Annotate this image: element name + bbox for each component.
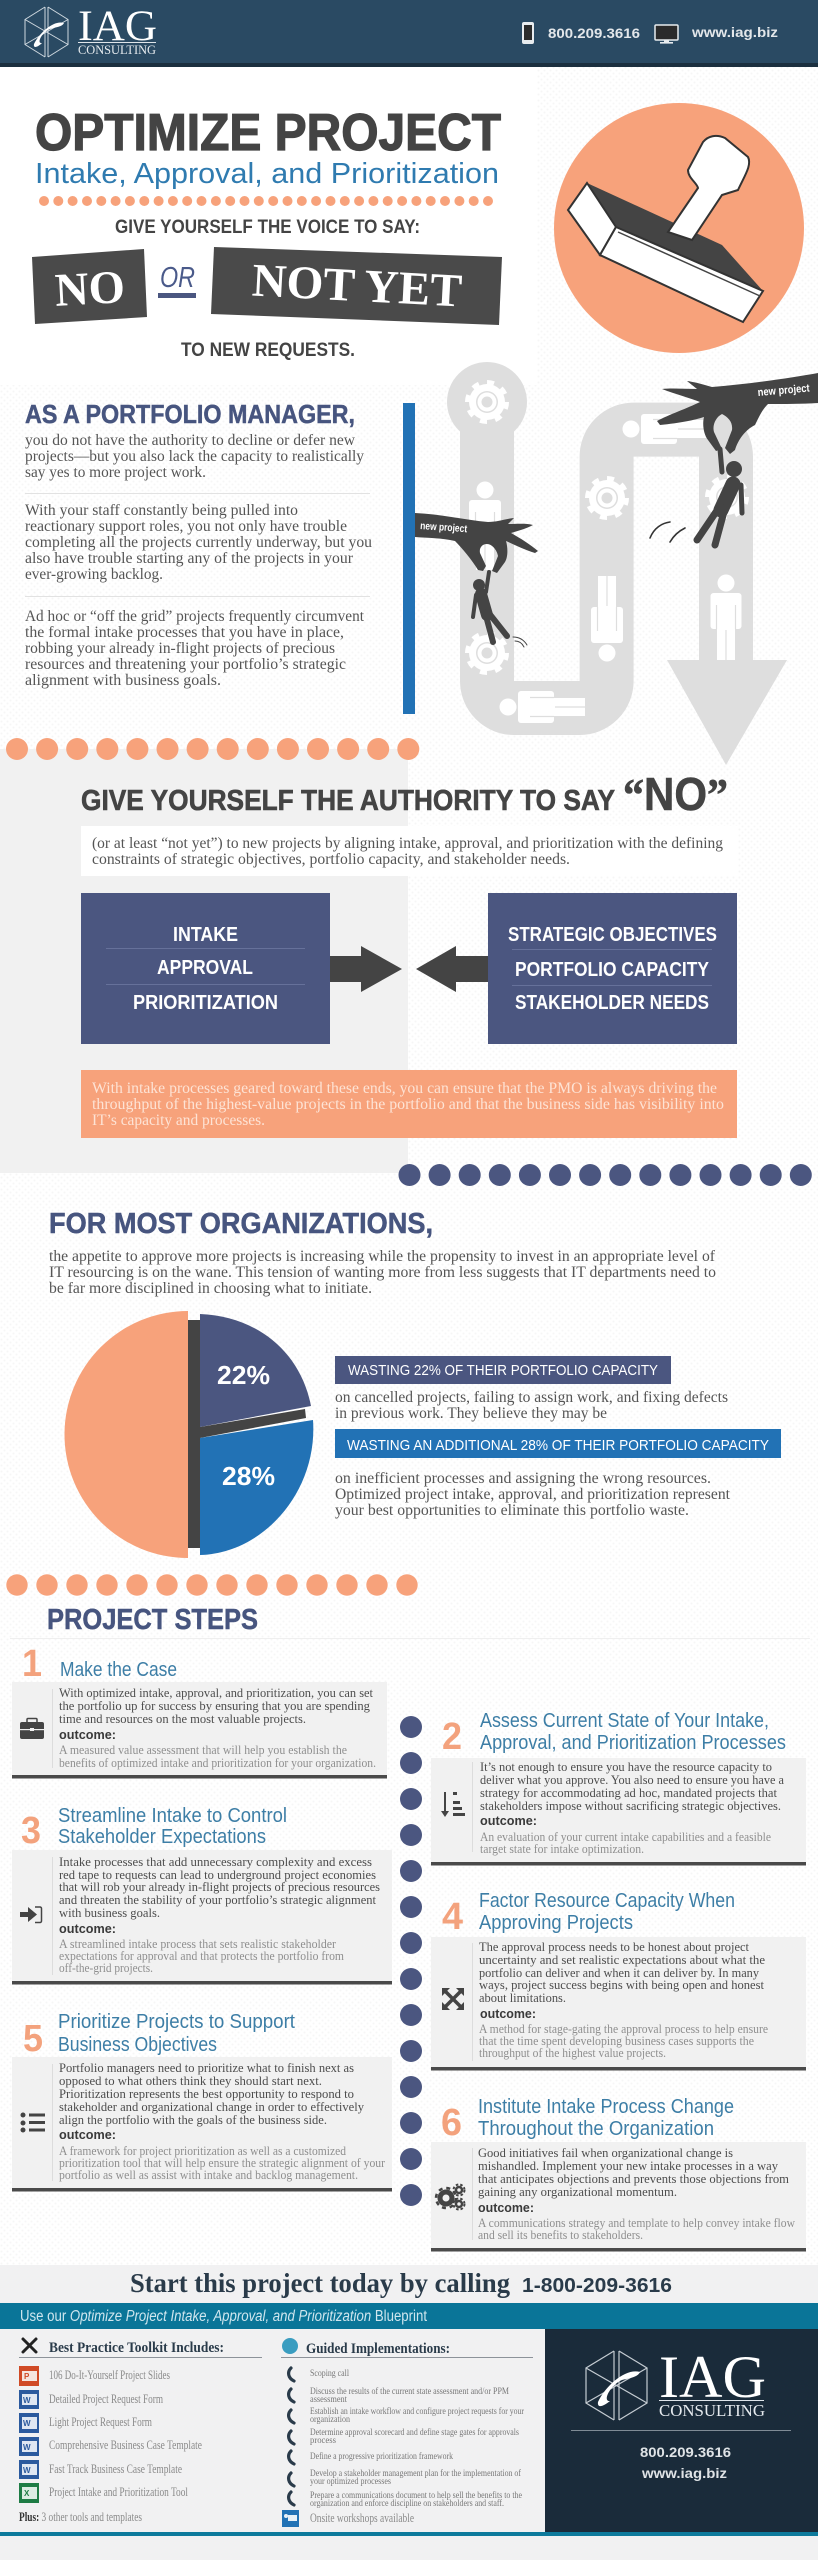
paragraph three — [25, 608, 365, 689]
step 5: Portfolio managers need to prioritize what to finish next as — [59, 2060, 354, 2075]
gear top — [468, 382, 506, 422]
intro text box: (or at least “not yet”) to new projects by aligning intake, approval, and prioritization with the defining — [92, 835, 723, 852]
step 1: the portfolio up for success by ensuring that you are spending — [59, 1698, 370, 1713]
step 2 — [431, 1710, 806, 1866]
phone icons — [289, 2368, 294, 2505]
icon: expand arrows — [442, 1988, 464, 2010]
box: intake approval prioritization: APPROVAL — [157, 957, 253, 979]
paragraph three: Ad hoc or “off the grid” projects frequently circumvent — [25, 608, 365, 625]
guided items: Prepare a communications document to help sell the benefits to the — [310, 2490, 522, 2501]
step 3: A streamlined intake process that sets realistic stakeholder — [59, 1937, 337, 1951]
step 2: outcome: — [480, 1813, 537, 1828]
teal blueprint band — [0, 2303, 818, 2329]
call to action: Start this project today by calling — [130, 2268, 510, 2298]
subtitle: Intake, Approval, and Prioritization — [35, 158, 499, 190]
icon: monitor — [655, 25, 678, 44]
label: wasting 28 — [335, 1429, 781, 1458]
guided items: your optimized processes — [310, 2477, 391, 2487]
gear lower left — [468, 634, 506, 672]
step 1: time and resources on the most valuable projects. — [59, 1711, 306, 1726]
box: intake approval prioritization — [81, 893, 330, 1044]
stamp: no — [32, 249, 147, 324]
blue bar — [403, 403, 415, 714]
icon: blue circle — [282, 2338, 298, 2354]
step 2: strategy for accommodating ad hoc, mandated projects that — [480, 1785, 777, 1800]
label: wasting 22 — [335, 1356, 671, 1384]
step 2: Assess Current State of Your Intake, — [480, 1710, 769, 1732]
icon: list — [20, 2112, 45, 2132]
toolkit item: light form: W — [23, 2419, 31, 2428]
header phone number: 800.209.3616 — [548, 25, 640, 41]
heading: authority to say no: “NO” — [623, 768, 728, 820]
paragraph one — [25, 432, 364, 481]
toolkit item: slides: 106 Do-It-Yourself Project Slides — [49, 2368, 170, 2382]
label: new project left: new project — [420, 520, 468, 535]
orange callout: With intake processes geared toward these ends, you can ensure that the PMO is always driving the — [92, 1080, 717, 1097]
step 1: benefits of optimized intake and prioritization for your organization. — [59, 1756, 376, 1770]
navy vertical dots — [400, 1716, 422, 2206]
guided heading: Guided Implementations: — [306, 2341, 450, 2357]
box: intake approval prioritization: INTAKE — [173, 924, 238, 946]
paragraph: appetite — [49, 1248, 716, 1297]
toolkit item: light form — [19, 2413, 152, 2433]
label: new project right: new project — [757, 382, 810, 399]
gear middle — [588, 478, 626, 518]
icon: sort — [441, 1792, 465, 1817]
toolkit item: fast track: Fast Track Business Case Template — [49, 2462, 182, 2476]
step 6: A communications strategy and template to help convey intake flow — [478, 2216, 795, 2230]
box: objectives capacity needs: STRATEGIC OBJECTIVES — [508, 924, 717, 946]
icon: rubber stamp in orange circle — [554, 103, 804, 353]
guided items: Discuss the results of the current state assessment and/or PPM — [310, 2386, 509, 2397]
tagline: GIVE YOURSELF THE VOICE TO SAY: — [115, 217, 420, 238]
person horizontal bottom — [500, 691, 585, 723]
road path — [447, 362, 787, 765]
text: cancelled projects — [335, 1389, 728, 1422]
step 3: Streamline Intake to Control — [58, 1805, 287, 1827]
paragraph three: the formal intake processes that you have in place, — [25, 624, 344, 641]
paragraph two: reactionary support roles, you not only have trouble — [25, 518, 347, 535]
stamp: no: NO — [54, 261, 126, 317]
heading: for most organizations: FOR MOST ORGANIZATIONS, — [49, 1208, 433, 1240]
box: objectives capacity needs — [488, 893, 737, 1044]
step 4: uncertainty and set realistic expectations about what the — [479, 1952, 765, 1967]
gray section background — [0, 749, 408, 1173]
heading: authority to say no — [81, 768, 728, 820]
step 6: outcome: — [478, 2200, 534, 2215]
paragraph two: ever-growing backlog. — [25, 566, 163, 583]
toolkit item: tool — [19, 2483, 188, 2503]
step 5: 5 — [23, 2018, 43, 2060]
paragraph: appetite: the appetite to approve more projects is increasing while the propensity to invest in an appropriate level of — [49, 1248, 716, 1265]
icon: sign in — [20, 1907, 42, 1922]
stamp: not yet — [211, 247, 502, 325]
step 4: portfolio can deliver and when it can deliver by. In many — [479, 1965, 759, 1980]
guided items: Determine approval scorecard and define stage gates for approvals — [310, 2427, 519, 2438]
paragraph two — [25, 502, 372, 583]
orange callout — [81, 1070, 737, 1138]
orange callout: IT’s capacity and processes. — [92, 1112, 265, 1129]
footer website: www.iag.biz — [641, 2465, 727, 2481]
intro text box — [81, 826, 738, 876]
step 3: Stakeholder Expectations — [58, 1826, 266, 1848]
icon: phone — [522, 22, 534, 44]
step 4: about limitations. — [479, 1990, 566, 2005]
stamp: not yet: NOT YET — [251, 255, 463, 317]
header logo — [25, 3, 157, 57]
step 2: An evaluation of your current intake capabilities and a feasible — [480, 1830, 771, 1844]
step 5: align the portfolio with the goals of the business side. — [59, 2112, 327, 2127]
paragraph three: resources and threatening your portfolio’s strategic — [25, 656, 346, 673]
paragraph two: With your staff constantly being pulled into — [25, 502, 298, 519]
label: wasting 22: WASTING 22% OF THEIR PORTFOLIO CAPACITY — [348, 1362, 658, 1379]
step 6: mishandled. Implement your new intake processes in a way — [478, 2158, 778, 2173]
step 5: stakeholder and organizational change in order to effectively — [59, 2099, 364, 2114]
panel: best practice toolkit — [19, 2339, 262, 2524]
to new requests: TO NEW REQUESTS. — [181, 340, 355, 361]
winding road illustration — [447, 362, 787, 765]
plus note: Plus: 3 other tools and templates — [19, 2510, 142, 2524]
step 6: and sell its benefits to stakeholders. — [478, 2228, 643, 2242]
pie chart: 22% — [217, 1360, 270, 1390]
gear right — [708, 478, 746, 516]
arrow: left — [416, 946, 488, 992]
step 1: outcome: — [59, 1727, 116, 1742]
toolkit item: detailed form: Detailed Project Request Form — [49, 2392, 163, 2406]
heading: AS A PORTFOLIO MANAGER, — [25, 399, 355, 429]
step 3: 3 — [21, 1810, 41, 1852]
toolkit item: fast track: W — [23, 2466, 31, 2475]
guided items: Define a progressive prioritization framework — [310, 2451, 453, 2462]
step 2: stakeholders impose without sacrificing strategic objectives. — [480, 1798, 781, 1813]
step 5: outcome: — [59, 2127, 116, 2142]
box: intake approval prioritization: PRIORITIZATION — [133, 992, 278, 1014]
step 3 — [12, 1805, 392, 1984]
step 5: A framework for project prioritization as well as a customized — [59, 2144, 347, 2158]
person horizontal top — [622, 414, 708, 444]
footer brand block — [545, 2329, 818, 2532]
header website: www.iag.biz — [691, 24, 778, 40]
step 6: gaining any organizational momentum. — [478, 2184, 677, 2199]
guided items: Establish an intake workflow and configure project requests for your — [310, 2406, 525, 2417]
text: cancelled projects: on cancelled projects, failing to assign work, and fixing defects — [335, 1389, 728, 1406]
orange dot divider — [6, 738, 419, 760]
step 1 — [12, 1643, 387, 1778]
person vertical left — [469, 482, 501, 570]
pie chart: 28% — [222, 1461, 275, 1491]
step 4: Approving Projects — [479, 1912, 633, 1934]
step 4: Factor Resource Capacity When — [479, 1890, 735, 1912]
step 1: With optimized intake, approval, and prioritization, you can set — [59, 1685, 373, 1700]
footer phone: 800.209.3616 — [640, 2444, 731, 2460]
toolkit item: tool: Project Intake and Prioritization Tool — [49, 2485, 188, 2499]
footer logo: IAG — [659, 2344, 766, 2410]
step 4: 4 — [442, 1896, 463, 1938]
paragraph three: alignment with business goals. — [25, 672, 221, 689]
step 2: deliver what you approve. You also need to ensure you have a — [480, 1772, 784, 1787]
guided items: assessment — [310, 2395, 347, 2405]
icon: workshop — [282, 2510, 299, 2527]
box: objectives capacity needs: PORTFOLIO CAPACITY — [515, 959, 710, 981]
step 4 — [431, 1890, 806, 2070]
orange dot row — [39, 196, 493, 206]
guided items: organization — [310, 2415, 350, 2425]
panel: guided implementations — [281, 2338, 533, 2527]
toolkit heading: Best Practice Toolkit Includes: — [49, 2340, 224, 2356]
panel: portfolio manager text — [25, 399, 372, 689]
toolkit item: business case: W — [23, 2443, 31, 2452]
step 5: opposed to what others think they should start next. — [59, 2073, 322, 2088]
paragraph: appetite: IT resourcing is on the wane. This tension of wanting more from less suggests that IT departments need to — [49, 1264, 716, 1281]
footer logo: CONSULTING — [659, 2401, 765, 2420]
step 6: Throughout the Organization — [478, 2118, 714, 2140]
step 3: Intake processes that add unnecessary complexity and excess — [59, 1854, 372, 1869]
person upside down — [591, 576, 623, 662]
title: OPTIMIZE PROJECT — [35, 104, 501, 162]
header logo: CONSULTING — [78, 42, 156, 57]
step 2: It’s not enough to ensure you have the resource capacity to — [480, 1759, 772, 1774]
step 5: portfolio as well as assist with intake and backlog management. — [59, 2168, 358, 2182]
paragraph one: you do not have the authority to decline or defer new — [25, 432, 356, 449]
step 5 — [12, 2011, 392, 2192]
heading: authority to say no: GIVE YOURSELF THE AUTHORITY TO SAY — [81, 785, 615, 817]
icon: tools — [23, 2339, 36, 2352]
step 5: prioritization tool that will help ensure the strategic alignment of your — [59, 2156, 386, 2170]
step 3: that will rob your already in-flight projects of precious resources — [59, 1879, 380, 1894]
header logo: IAG — [78, 3, 157, 50]
step 2: Approval, and Prioritization Processes — [480, 1732, 786, 1754]
toolkit item: fast track — [19, 2460, 182, 2479]
intro text box: constraints of strategic objectives, portfolio capacity, and stakeholder needs. — [92, 851, 570, 868]
text: inefficient processes — [335, 1470, 731, 1519]
hanging figure right — [650, 449, 742, 545]
paragraph one: say yes to more project work. — [25, 464, 206, 481]
step 5: Prioritize Projects to Support — [58, 2011, 295, 2033]
teal blueprint band: Use our Optimize Project Intake, Approval, and Prioritization Blueprint — [20, 2308, 428, 2325]
step 2: 2 — [442, 1716, 462, 1758]
header bar — [0, 0, 818, 67]
toolkit item: business case: Comprehensive Business Case Template — [49, 2438, 202, 2452]
left hand holding figure — [415, 513, 538, 647]
text: inefficient processes: your best opportunities to eliminate this portfolio waste. — [335, 1502, 689, 1519]
text: inefficient processes: Optimized project intake, approval, and prioritization represent — [335, 1486, 731, 1503]
right hand holding figure — [650, 373, 818, 545]
step 2: target state for intake optimization. — [480, 1842, 644, 1856]
step 6: that anticipates objections and prevents those objections from — [478, 2171, 789, 2186]
box: objectives capacity needs: STAKEHOLDER NEEDS — [515, 992, 709, 1014]
toolkit item: slides — [19, 2366, 170, 2386]
call to action: 1-800-209-3616 — [522, 2275, 672, 2297]
arrow: right — [330, 946, 402, 992]
step 6 — [431, 2096, 806, 2252]
step 5: Business Objectives — [58, 2034, 217, 2056]
toolkit item: business case — [19, 2437, 202, 2456]
step 4: A method for stage-gating the approval process to help ensure — [479, 2022, 768, 2036]
toolkit item: tool: X — [24, 2489, 30, 2498]
hanging figure left — [473, 572, 527, 647]
step 3: and threaten the stability of your portfolio’s strategic alignment — [59, 1892, 376, 1907]
icon: gears — [436, 2184, 464, 2210]
label: wasting 28: WASTING AN ADDITIONAL 28% OF THEIR PORTFOLIO CAPACITY — [347, 1437, 769, 1454]
step 1: Make the Case — [60, 1659, 177, 1681]
paragraph one: projects—but you also lack the capacity to realistically — [25, 448, 364, 465]
or: OR — [160, 262, 195, 294]
toolkit item: detailed form — [19, 2390, 163, 2409]
step 3: with business goals. — [59, 1905, 160, 1920]
step 1: A measured value assessment that will help you establish the — [59, 1743, 347, 1757]
toolkit item: slides: P — [24, 2372, 30, 2381]
guided items: Scoping call — [310, 2369, 349, 2379]
person vertical right — [710, 574, 742, 660]
step 4: ways, project success begins with being open and honest — [479, 1977, 764, 1992]
heading: project steps: PROJECT STEPS — [47, 1604, 258, 1636]
paragraph two: also have trouble starting any of the projects in your — [25, 550, 354, 567]
onsite text: Onsite workshops available — [310, 2511, 414, 2525]
text: inefficient processes: on inefficient processes and assigning the wrong resources. — [335, 1470, 711, 1487]
step 6: Good initiatives fail when organizational change is — [478, 2145, 733, 2160]
step 6: Institute Intake Process Change — [478, 2096, 734, 2118]
paragraph three: robbing your already in-flight projects of precious — [25, 640, 335, 657]
step 4: throughput of the highest value projects. — [479, 2046, 666, 2060]
step 3: expectations for approval and that protects the portfolio from — [59, 1949, 344, 1963]
navy dot divider — [398, 1164, 812, 1186]
step 3: off-the-grid projects. — [59, 1961, 153, 1975]
toolkit item: light form: Light Project Request Form — [49, 2415, 152, 2429]
text: cancelled projects: in previous work. They believe they may be — [335, 1405, 607, 1422]
step 4: The approval process needs to be honest about project — [479, 1939, 749, 1954]
step 4: that the time spent developing business cases supports the — [479, 2034, 754, 2048]
guided items — [310, 2369, 525, 2509]
guided items: organization and enforce discipline on stakeholders and staff. — [310, 2498, 504, 2509]
icon: briefcase — [20, 1718, 44, 1739]
guided items: Develop a stakeholder management plan for the implementation of — [310, 2468, 522, 2479]
toolkit item: detailed form: W — [23, 2396, 31, 2405]
orange callout: throughput of the highest-value projects in the portfolio and that the business side has visibility into — [92, 1096, 724, 1113]
pie chart — [64, 1311, 313, 1558]
orange dot divider — [6, 1574, 418, 1596]
paragraph: appetite: be far more disciplined in choosing what to initiate. — [49, 1280, 372, 1297]
step 3: red tape to requests can lead to underground project economies — [59, 1867, 376, 1882]
step 4: outcome: — [480, 2006, 536, 2021]
step 3: outcome: — [59, 1921, 116, 1936]
step 1: 1 — [22, 1643, 42, 1685]
footer background — [0, 2265, 818, 2560]
guided items: process — [310, 2436, 336, 2446]
paragraph two: completing all the projects currently underway, but you — [25, 534, 372, 551]
step 5: Prioritization represents the best opportunity to respond to — [59, 2086, 354, 2101]
footer logo — [586, 2344, 766, 2420]
step 6: 6 — [441, 2102, 462, 2144]
